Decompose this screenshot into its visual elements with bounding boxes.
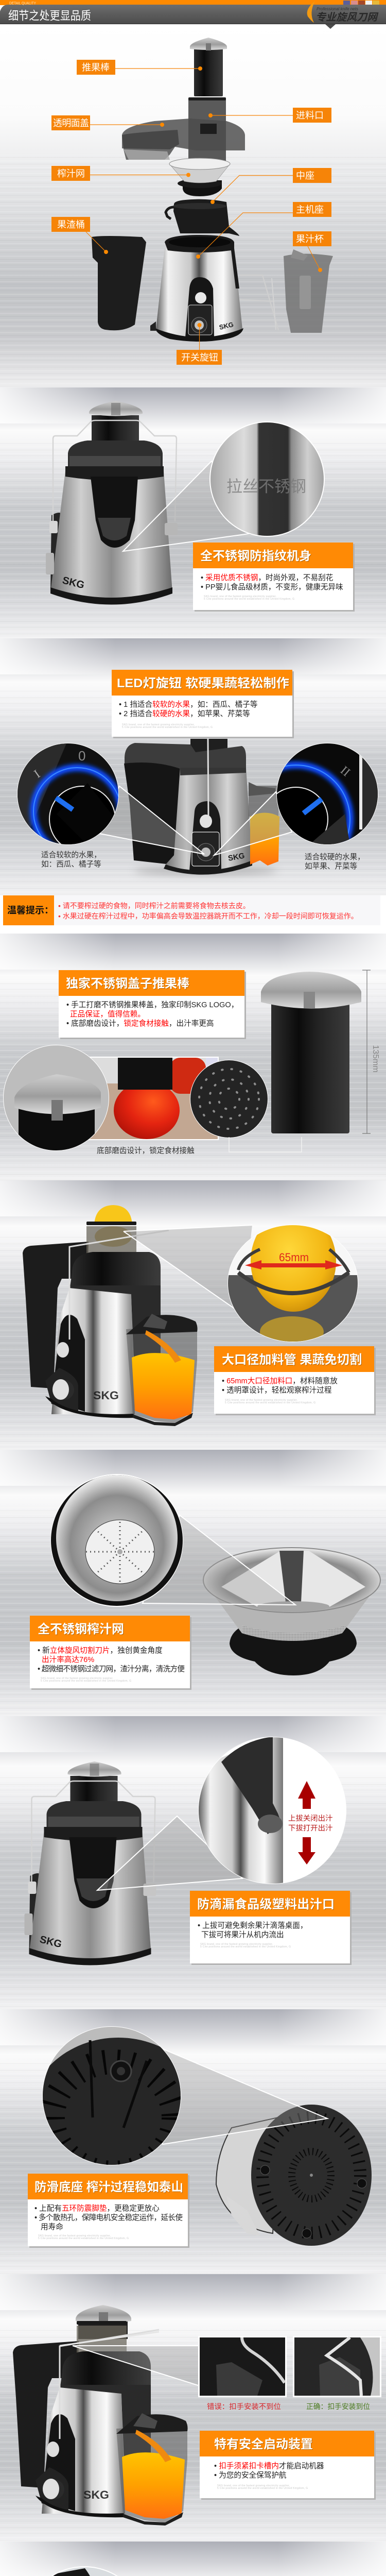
header: detail quality: 专业旋风刀网 (315, 11, 379, 23)
callout: 进料口: 进料口 (296, 110, 324, 121)
section background: exploded view (0, 24, 386, 387)
card: 全不锈钢防指纹机身 (200, 549, 311, 563)
text: soft fruit (41, 850, 101, 869)
text: hard fruit (305, 852, 365, 871)
part: handle wire (206, 275, 278, 330)
header: detail quality: Professional knife nets (317, 6, 359, 11)
card: 出汁率高达76% (42, 1655, 94, 1664)
magnified knob I: 0 (78, 748, 85, 764)
65mm label: 65mm (279, 1251, 309, 1264)
panel: large feed tube (0, 1180, 386, 1450)
juicer side view with lemon: SKG (93, 1389, 119, 1402)
card: • 多个散热孔，保障电机安全稳定运作，延长使 (34, 2213, 183, 2222)
card: 5 Cite positions around the world established in the United Kingdom, G (225, 1401, 315, 1404)
tip panel: • 请不要榨过硬的食物，同时榨汁之前需要将食物去核去皮。 (58, 902, 250, 910)
pointer wedge (97, 1816, 242, 1890)
card: • 上配有五环防震脚垫，更稳定更放心 (34, 2204, 160, 2213)
panel: stainless body (0, 387, 386, 638)
callout: 果渣桶 (51, 217, 108, 254)
card (190, 1891, 352, 1965)
juicer side view with lemon (23, 1205, 198, 1426)
header: detail quality: DETAIL QUALITY (9, 1, 36, 5)
juicer with juice cup (124, 739, 279, 875)
text: open: 下拔打开出汁 (288, 1824, 332, 1833)
card: SKG brand, one of the fastest growing electricity supplier, (41, 1677, 113, 1680)
card (112, 670, 294, 738)
part: pulp bucket (92, 236, 146, 330)
card: 5 Cite positions around the world established in the United Kingdom, G (38, 2237, 129, 2240)
card: • 新立体旋风切割刀片，独创黄金角度 (38, 1646, 163, 1655)
magnified pulp (51, 2566, 117, 2576)
card: 特有安全启动装置 (214, 2437, 313, 2451)
magnified knob II (276, 743, 378, 845)
tomato photo (89, 1057, 219, 1140)
card: 大口径加料管 果蔬免切割 (222, 1353, 362, 1367)
card: LED灯旋钮 软硬果蔬轻松制作 (117, 676, 289, 690)
panel: pulp bucket (0, 2541, 386, 2576)
bracket (229, 1137, 302, 1152)
callout: 透明面盖: 透明面盖 (53, 118, 89, 128)
card: 正品保证，值得信赖。 (70, 1010, 145, 1019)
part: main body (150, 235, 243, 342)
callout: 果汁杯 (293, 231, 331, 272)
magnified knob I (17, 743, 119, 845)
big sieve (203, 1548, 381, 1675)
card: • 手工打磨不锈钢推果棒盖，独家印制SKG LOGO， (66, 1001, 238, 1009)
magnified base (42, 2026, 181, 2165)
callout: 榨汁网 (51, 166, 190, 181)
callout: 果汁杯: 果汁杯 (296, 234, 324, 244)
card: • 透明罩设计，轻松观察榨汁过程 (222, 1385, 332, 1395)
magnified lemon (227, 1225, 358, 1342)
card: SKG brand, one of the fastest growing electricity supplier, (38, 2234, 111, 2238)
card: • 底部磨齿设计，锁定食材接触，出汁率更高 (66, 1019, 214, 1028)
header: detail quality (0, 0, 386, 29)
card: • 采用优质不锈钢，时尚外观，不易刮花 (201, 573, 333, 582)
card: SKG brand, one of the fastest growing electricity supplier, (225, 1399, 297, 1402)
dimension line: 135mm (371, 1045, 380, 1073)
card: SKG brand, one of the fastest growing electricity supplier, (122, 723, 195, 726)
card (30, 1616, 191, 1690)
juicer front view (25, 1761, 156, 1965)
pointer wedge (73, 2346, 198, 2385)
card: • PP婴儿食品级材质，不变形，健康无异味 (201, 583, 343, 591)
part: middle seat (166, 199, 239, 236)
card: • 1 挡适合较软的水果，如：西瓜、橘子等 (119, 700, 257, 709)
tip panel: • 水果过硬在榨汁过程中，功率偏高会导致温控器跳开而不工作，冷却一段时间即可恢复运作。 (58, 912, 358, 920)
panel: LED knob (0, 638, 386, 895)
magnified cap (0, 1045, 109, 1154)
card: 5 Cite positions around the world established in the United Kingdom, G (204, 598, 294, 601)
juicer front view (46, 401, 178, 605)
juicer side view with pusher (13, 2305, 188, 2526)
text: hard fruit: 适合较硬的水果， (305, 852, 365, 861)
callout: 开关旋钮 (177, 323, 222, 365)
magnified teeth (189, 1060, 269, 1139)
up arrow (298, 1781, 315, 1809)
card: SKG brand, one of the fastest growing electricity supplier, (204, 595, 276, 598)
pointer wedge (124, 1225, 252, 1314)
callout: 中座 (210, 168, 331, 204)
pointer wedge (123, 461, 249, 551)
card: SKG brand, one of the fastest growing electricity supplier, (200, 1943, 273, 1946)
callout: 透明面盖 (51, 115, 164, 130)
callout: 推果棒 (77, 60, 202, 75)
card: • 2 挡适合较硬的水果，如苹果、芹菜等 (119, 709, 250, 718)
callout: 果渣桶: 果渣桶 (57, 219, 85, 230)
text: soft fruit: 如：西瓜、橘子等 (41, 859, 101, 869)
magnified knob I: I (32, 768, 43, 781)
exploded juicer illustration (92, 38, 333, 342)
callout: 主机座: 主机座 (296, 205, 324, 215)
pointer wedges (100, 786, 204, 854)
callout: 推果棒: 推果棒 (82, 62, 110, 73)
panel: non-slip base (0, 2009, 386, 2274)
card: 全不锈钢榨汁网 (38, 1622, 124, 1636)
card (200, 2431, 376, 2500)
card: 下拔可将果汁从机内流出 (201, 1930, 284, 1939)
card: 防滑底座 榨汁过程稳如泰山 (34, 2180, 183, 2194)
magnified brushed steel (209, 421, 325, 537)
card (193, 543, 355, 612)
big pusher (261, 972, 361, 1133)
underside of juicer (216, 2105, 372, 2246)
card: • 超微细不锈钢过滤刀网，渣汁分离，清洗方便 (38, 1665, 185, 1673)
card (59, 970, 246, 1039)
pointer wedge (143, 1515, 295, 1605)
juicer side view with pusher: SKG (83, 2488, 109, 2501)
juicer front view: SKG (39, 1934, 63, 1950)
text: correct: 正确：扣手安装到位 (306, 2402, 370, 2411)
photo: correct install (293, 2336, 381, 2397)
header: detail quality: 细节之处更显品质 (8, 9, 91, 22)
text: close: 上拔关闭出汁 (288, 1814, 332, 1823)
card: 5 Cite positions around the world established in the United Kingdom, G (122, 726, 213, 729)
callout: 开关旋钮: 开关旋钮 (181, 352, 218, 363)
magnified spout (198, 1737, 347, 1886)
card (28, 2174, 189, 2248)
part: sieve and base (169, 158, 230, 196)
card: 5 Cite positions around the world established in the United Kingdom, G (217, 2487, 308, 2490)
card: 独家不锈钢盖子推果棒 (66, 977, 189, 991)
part: transparent lid with feed tube (122, 97, 245, 161)
magnified blade (50, 1474, 184, 1607)
down arrow (298, 1837, 315, 1865)
card: • 65mm大口径加料口，材料随意放 (222, 1376, 338, 1385)
juicer front view: SKG (61, 575, 85, 591)
photo: wrong install (198, 2336, 287, 2397)
panel: drip-proof spout (0, 1716, 386, 2009)
card: 5 Cite positions around the world established in the United Kingdom, G (200, 1945, 291, 1948)
65mm arrow (245, 1260, 342, 1269)
card: • 扣手须紧扣卡槽内才能启动机器 (214, 2462, 324, 2470)
card: • 上拔可避免剩余果汁滴落桌面， (198, 1921, 307, 1930)
card: • 为您的安全保驾护航 (214, 2470, 287, 2480)
callout: 中座: 中座 (296, 171, 314, 181)
card: SKG brand, one of the fastest growing electricity supplier, (217, 2484, 290, 2487)
panel: pusher (0, 934, 386, 1180)
part: pusher (190, 38, 227, 96)
juicer with juice cup: SKG (227, 852, 245, 863)
callout: 榨汁网: 榨汁网 (57, 168, 85, 179)
pointer wedge (163, 2049, 327, 2144)
card: 5 Cite positions around the world established in the United Kingdom, G (41, 1680, 131, 1683)
card: 防滴漏食品级塑料出汁口 (197, 1897, 335, 1911)
magnified knob II: II (338, 764, 353, 779)
text: hard fruit: 如苹果、芹菜等 (305, 861, 357, 871)
text: wrong: 错误：扣手安装不到位 (207, 2402, 281, 2411)
panel: stainless sieve (0, 1450, 386, 1716)
tip panel: 温馨提示： (7, 905, 54, 916)
part: juice cup (272, 249, 333, 333)
magnified brushed steel: 拉丝不锈钢 (226, 478, 306, 496)
card (214, 1346, 376, 1415)
part: main body: SKG (218, 320, 234, 331)
tip panel (0, 895, 386, 934)
callout: 进料口 (208, 108, 331, 123)
card: 用寿命 (41, 2222, 63, 2231)
panel: safety start (0, 2274, 386, 2541)
caption: 底部磨齿设计，锁定食材接触 (97, 1146, 195, 1155)
callout: 主机座 (196, 202, 331, 259)
text: soft fruit: 适合较软的水果， (41, 850, 101, 859)
dimension line (362, 970, 380, 1133)
